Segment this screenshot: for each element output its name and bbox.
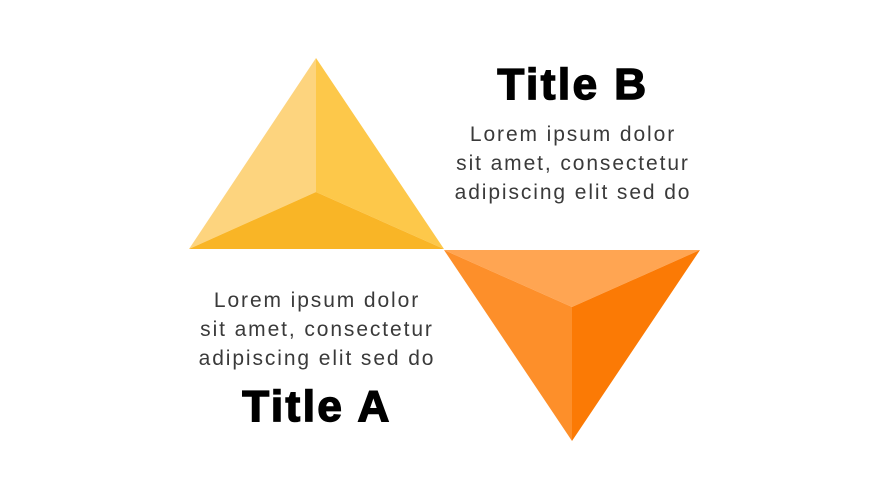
text A: adipiscing elit sed do: [199, 347, 435, 370]
text B: sit amet, consectetur: [456, 152, 690, 175]
text B: [455, 123, 691, 204]
yellow pyramid facets: [189, 58, 444, 249]
text A: [199, 289, 435, 370]
text B: adipiscing elit sed do: [455, 181, 691, 204]
title A: Title A: [242, 382, 392, 431]
text A: Lorem ipsum dolor: [214, 289, 420, 312]
title B: Title B: [497, 60, 649, 109]
text A: sit amet, consectetur: [200, 318, 434, 341]
orange inverted pyramid facets: [444, 250, 700, 441]
text B: Lorem ipsum dolor: [470, 123, 676, 146]
